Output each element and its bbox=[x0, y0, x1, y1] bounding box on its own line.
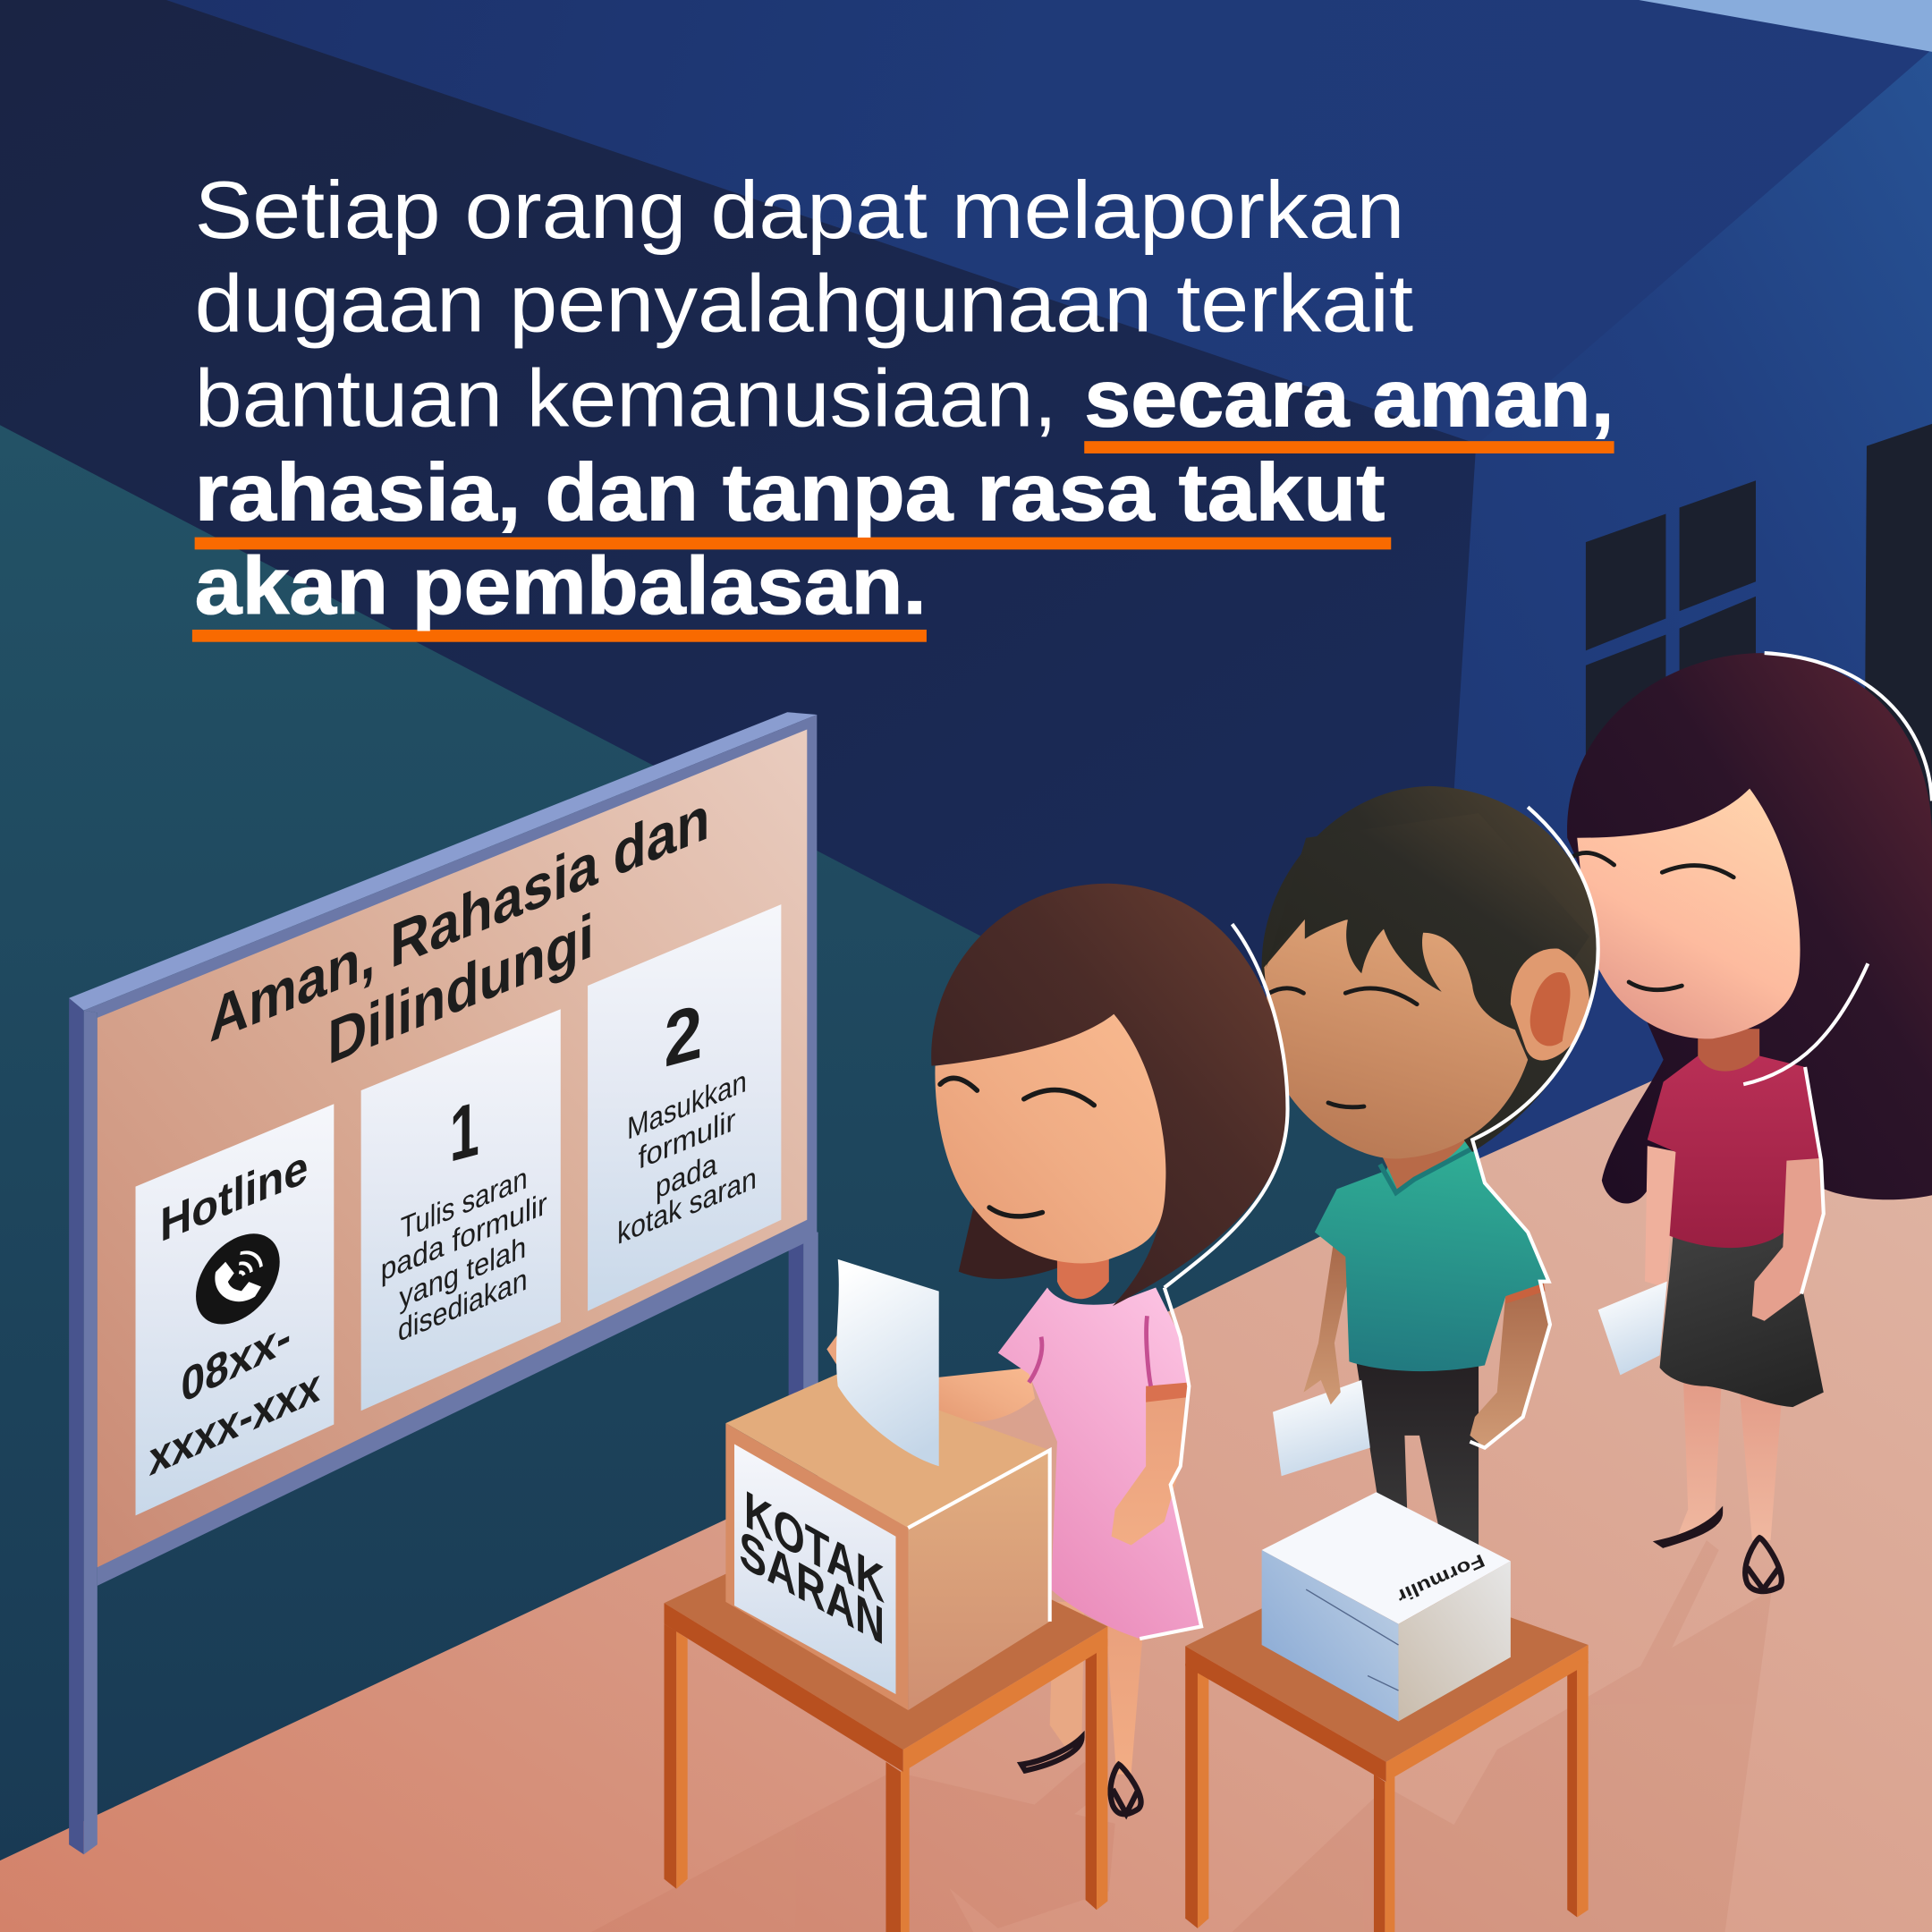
board title: Dilindungi bbox=[327, 901, 594, 1079]
card: step 2: 2 bbox=[664, 988, 702, 1084]
heading bold lines bbox=[195, 354, 1614, 631]
reaching arm bbox=[936, 1368, 1035, 1422]
trousers bbox=[1355, 1355, 1479, 1553]
face bbox=[935, 1014, 1165, 1263]
heading regular lines: bantuan kemanusiaan, bbox=[195, 354, 1057, 445]
table with forms bbox=[1185, 1492, 1589, 1932]
person: woman in pink dress bbox=[931, 884, 1288, 1814]
white outline bbox=[1743, 653, 1932, 1293]
arms bbox=[1303, 1244, 1353, 1404]
back hair bbox=[959, 1208, 1090, 1279]
heading underlines bbox=[192, 441, 1614, 642]
card: step 2 bbox=[588, 904, 781, 1311]
box label: SARAN bbox=[740, 1519, 885, 1657]
card: step 2: pada bbox=[656, 1146, 717, 1206]
box label bbox=[734, 1444, 895, 1694]
hair back bbox=[1262, 786, 1598, 1152]
right arm bbox=[1752, 1158, 1824, 1321]
skirt bbox=[1660, 1226, 1824, 1407]
hair bbox=[931, 884, 1288, 1306]
white outline bbox=[1470, 807, 1598, 1448]
cuff bbox=[1505, 1276, 1545, 1303]
legs bbox=[1675, 1374, 1782, 1540]
long hair back bbox=[1567, 653, 1932, 1203]
sandals bbox=[1660, 1513, 1782, 1591]
card: step 1: pada formulir bbox=[381, 1186, 547, 1288]
sandals bbox=[1021, 1737, 1141, 1814]
face bbox=[1264, 918, 1528, 1158]
floor shadows bbox=[591, 1540, 1772, 1932]
table top bbox=[1185, 1563, 1589, 1782]
board panel bbox=[97, 730, 807, 1567]
ear bbox=[1511, 948, 1589, 1061]
card: step 1: 1 bbox=[450, 1086, 479, 1179]
paper held over the box bbox=[826, 1259, 939, 1466]
shirt bbox=[1648, 1056, 1821, 1248]
floor bbox=[0, 955, 1932, 1932]
teal side wall bbox=[0, 425, 1466, 1873]
paper bbox=[1598, 1282, 1667, 1375]
person: woman in long dark hair bbox=[1567, 653, 1932, 1591]
fringe bbox=[1264, 813, 1589, 1032]
heading bold lines: rahasia, dan tanpa rasa takut bbox=[195, 447, 1385, 538]
card: hotline: xxxx-xxx bbox=[149, 1357, 321, 1487]
icon: phone bbox=[196, 1220, 280, 1338]
table top bbox=[664, 1510, 1107, 1772]
heading regular lines bbox=[195, 165, 1413, 445]
card: hotline: 08xx- bbox=[181, 1308, 291, 1413]
heading regular lines: dugaan penyalahgunaan terkait bbox=[195, 259, 1413, 350]
white outline bbox=[1140, 924, 1288, 1639]
table legs bbox=[1185, 1661, 1589, 1932]
heading regular lines: Setiap orang dapat melaporkan bbox=[195, 165, 1404, 256]
face bbox=[1577, 789, 1801, 1038]
board frame bbox=[69, 712, 817, 1586]
eyes and mouth bbox=[1269, 988, 1417, 1107]
card: step 1: Tulis saran bbox=[401, 1160, 528, 1246]
card: step 2: Masukkan bbox=[627, 1063, 747, 1147]
eyes and mouth bbox=[1571, 852, 1733, 990]
heading bold lines: secara aman, bbox=[1084, 354, 1614, 445]
table legs bbox=[664, 1624, 1107, 1932]
card: step 1: yang telah bbox=[399, 1229, 526, 1316]
hand bbox=[826, 1331, 854, 1377]
board title: Aman, Rahasia dan bbox=[209, 783, 709, 1056]
stack of forms: Formulir bbox=[1394, 1550, 1487, 1606]
card: step 1: disediakan bbox=[398, 1261, 528, 1349]
notice board bbox=[69, 712, 818, 1854]
dress bbox=[998, 1288, 1201, 1639]
windows and door bbox=[1586, 424, 1932, 1022]
card: step 1 bbox=[361, 1009, 561, 1411]
card: hotline bbox=[136, 1104, 334, 1515]
card: step 2: formulir bbox=[639, 1102, 735, 1176]
paper sheet bbox=[836, 1259, 939, 1466]
legs bbox=[1050, 1602, 1084, 1750]
board posts bbox=[69, 998, 818, 1854]
neck bbox=[1698, 1029, 1759, 1076]
neck bbox=[1380, 1140, 1466, 1192]
heading bbox=[192, 165, 1614, 642]
neck bbox=[1057, 1250, 1109, 1299]
eyes and mouth bbox=[940, 1078, 1094, 1216]
hanging arm bbox=[1112, 1393, 1185, 1545]
paper bbox=[1273, 1380, 1370, 1476]
left arm bbox=[1645, 1146, 1678, 1288]
cuff bbox=[1146, 1383, 1188, 1402]
suggestion box bbox=[725, 1374, 1050, 1710]
table with suggestion box bbox=[664, 1374, 1107, 1932]
sleeve folds bbox=[1029, 1316, 1151, 1386]
heading bold lines: akan pembalasan. bbox=[195, 541, 927, 631]
person: man in green shirt bbox=[1262, 786, 1598, 1553]
stack of forms bbox=[1262, 1492, 1511, 1721]
card: hotline: Hotline bbox=[160, 1140, 308, 1252]
shirt bbox=[1315, 1140, 1549, 1371]
card: step 2: kotak saran bbox=[617, 1160, 757, 1251]
box label: KOTAK bbox=[744, 1479, 885, 1615]
